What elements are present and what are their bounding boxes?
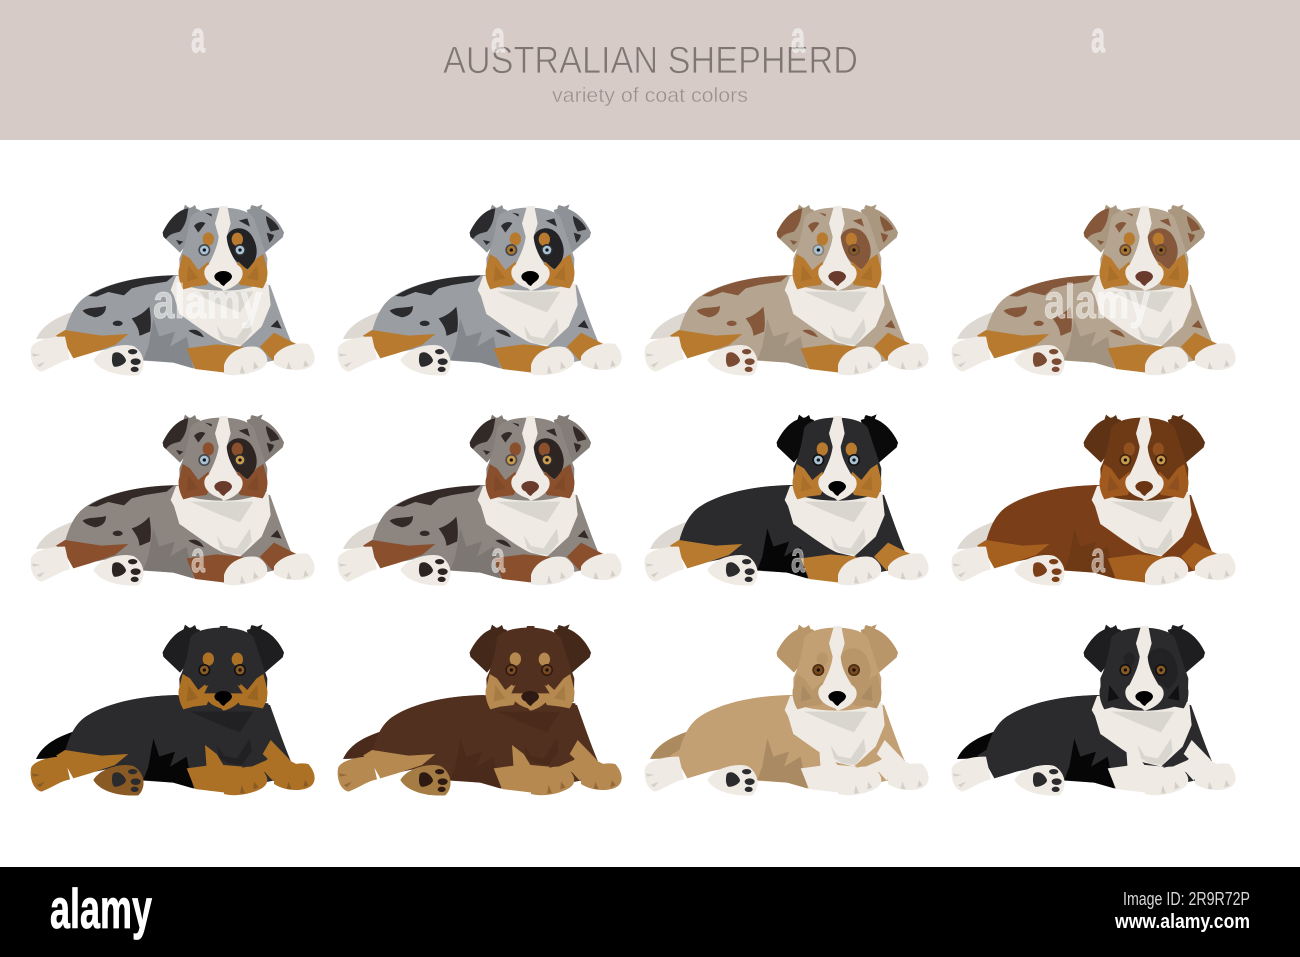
watermarks: a: [1091, 13, 1105, 62]
dog: black and white, row 3 column 4: [952, 624, 1236, 796]
dog: black tricolor, row 2 column 3: [645, 414, 929, 586]
watermarks: a: [791, 533, 805, 582]
watermarks: a: [191, 533, 205, 582]
title: AUSTRALIAN SHEPHERD: [443, 40, 858, 82]
watermarks: [153, 13, 1150, 582]
dog: liver and tan, row 3 column 2: [338, 624, 622, 796]
dog: blue merle, row 1 column 2: [338, 204, 622, 376]
image id: Image ID: 2R9R72P: [1123, 889, 1250, 909]
footer logo: alamy: [50, 877, 152, 940]
dog: grey merle, row 2 column 1: [31, 414, 315, 586]
dog: red merle, row 1 column 3: [645, 204, 929, 376]
footer band: [0, 867, 1300, 957]
watermarks: alamy: [153, 276, 262, 329]
subtitle: variety of coat colors: [552, 85, 748, 107]
watermarks: alamy: [1044, 276, 1150, 329]
watermarks: a: [191, 13, 205, 62]
dog: grey merle, row 2 column 2: [338, 414, 622, 586]
watermarks: a: [791, 13, 805, 62]
dog: black and tan, row 3 column 1: [31, 624, 315, 796]
dog: red merle, row 1 column 4: [952, 204, 1236, 376]
header band: [0, 0, 1300, 140]
dog: red tricolor, row 2 column 4: [952, 414, 1236, 586]
website: www.alamy.com: [1114, 911, 1250, 933]
dog: fawn and white, row 3 column 3: [645, 624, 929, 796]
watermarks: a: [1091, 533, 1105, 582]
dog: blue merle, row 1 column 1: [31, 204, 315, 376]
watermarks: a: [491, 13, 505, 62]
watermarks: a: [491, 533, 505, 582]
